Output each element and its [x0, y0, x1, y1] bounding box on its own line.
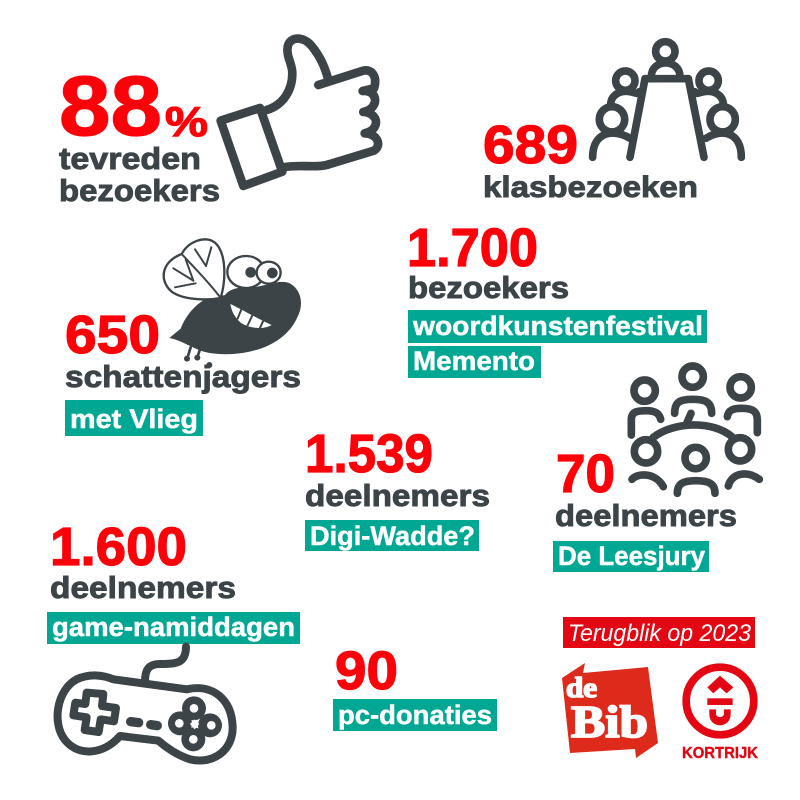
icon: meeting table with people: [593, 42, 741, 157]
stat: 88% tevreden bezoekers: 88: [59, 59, 162, 153]
stat: 70 deelnemers De Leesjury: deelnemers: [555, 498, 737, 533]
label: Digi-Wadde?: Digi-Wadde?: [310, 521, 475, 551]
stat: 1.700 bezoekers woordkunstenfestival Memento: 1.700: [407, 218, 538, 278]
stat: 1.539 deelnemers Digi-Wadde?: [305, 424, 490, 551]
stat: 1.600 deelnemers game-namiddagen: deelnemers: [50, 570, 236, 605]
logo: de Bib: [562, 663, 658, 758]
label: Memento: Memento: [413, 346, 535, 376]
stat: 70 deelnemers De Leesjury: 70: [556, 444, 615, 504]
banner: Terugblik op 2023: Terugblik op 2023: [568, 620, 752, 647]
logo: Kortrijk: [682, 667, 759, 762]
stat: 1.700 bezoekers woordkunstenfestival Memento: [407, 218, 707, 378]
stat: 689 klasbezoeken: klasbezoeken: [483, 171, 698, 204]
stat: 1.600 deelnemers game-namiddagen: 1.600: [50, 517, 187, 577]
label: De Leesjury: De Leesjury: [558, 541, 705, 571]
stat: 88% tevreden bezoekers: tevreden: [59, 141, 201, 176]
stat: 88% tevreden bezoekers: %: [165, 98, 208, 145]
stat: 88% tevreden bezoekers: bezoekers: [59, 173, 220, 208]
icon: fly: [164, 239, 301, 368]
logo: de Bib: de: [566, 672, 597, 704]
stat: 1.539 deelnemers Digi-Wadde?: deelnemers: [305, 478, 490, 513]
logo: de Bib: Bib: [571, 696, 648, 747]
icon: game controller: [58, 647, 233, 761]
stat: 70 deelnemers De Leesjury: [553, 444, 737, 572]
icon: group of people around a table: [631, 366, 759, 493]
label: game-namiddagen: game-namiddagen: [52, 612, 295, 642]
stat: 90 pc-donaties: [333, 641, 497, 731]
stat: 1.700 bezoekers woordkunstenfestival Memento: bezoekers: [408, 270, 569, 305]
label: pc-donaties: pc-donaties: [338, 700, 492, 730]
stat: 689 klasbezoeken: 689: [483, 115, 578, 175]
stat: 88% tevreden bezoekers: [59, 59, 220, 208]
label: met Vlieg: met Vlieg: [70, 404, 198, 434]
stat: 90 pc-donaties: 90: [335, 641, 398, 701]
icon: thumbs up: [221, 39, 378, 186]
stat: 1.539 deelnemers Digi-Wadde?: 1.539: [305, 424, 433, 484]
stat: 1.600 deelnemers game-namiddagen: [47, 517, 300, 644]
stat: 650 schattenjagers met Vlieg: 650: [65, 305, 160, 365]
stat: 650 schattenjagers met Vlieg: schattenjagers: [65, 359, 301, 394]
label: woordkunstenfestival: woordkunstenfestival: [412, 311, 703, 341]
stat: 689 klasbezoeken: [483, 115, 698, 204]
stat: 650 schattenjagers met Vlieg: [65, 305, 301, 436]
logo: Kortrijk: KORTRIJK: [682, 745, 759, 762]
